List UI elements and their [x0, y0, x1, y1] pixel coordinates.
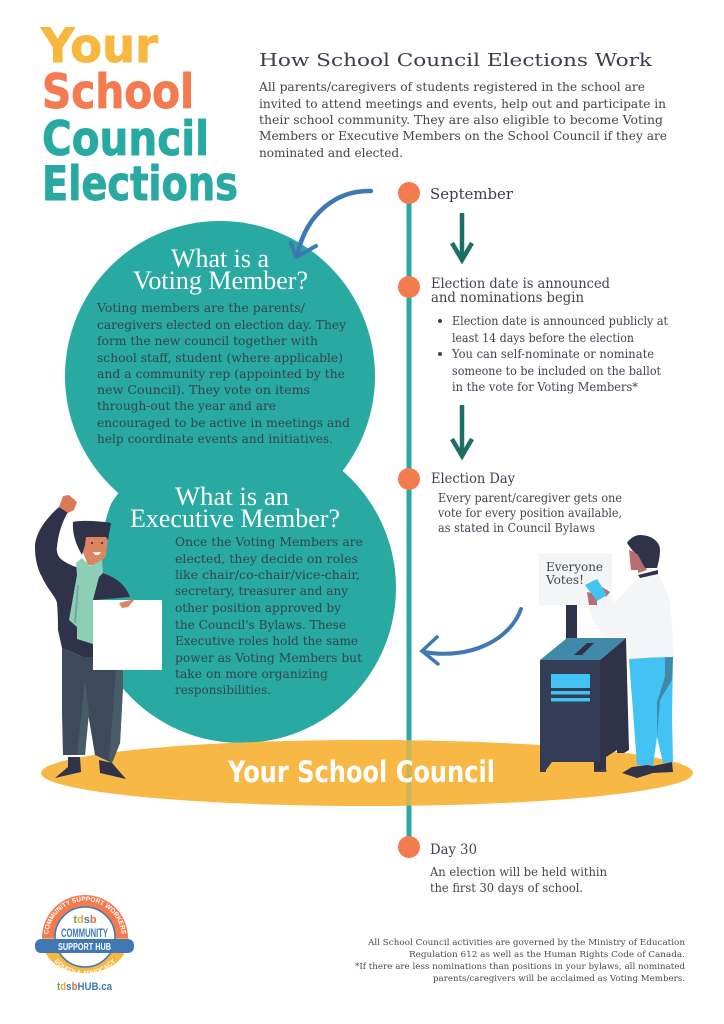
text: voting member description [96, 300, 350, 446]
arrow: blue curve to executive member [422, 609, 521, 664]
text: executive member description: secretary, treasurer and any [175, 583, 349, 598]
label: September: September [430, 185, 514, 203]
arrow: green down 1 [452, 213, 472, 260]
title [40, 19, 238, 212]
sign [93, 600, 162, 670]
text: day 30: Day 30 [430, 842, 477, 858]
text: executive member description: elected, they decide on roles [175, 551, 358, 566]
text: executive member description: other position approved by [175, 600, 342, 615]
intro text block: nominated and elected. [259, 145, 403, 160]
text: nominations: and nominations begin [431, 290, 584, 306]
text: election day: Every parent/caregiver gets one [438, 490, 622, 505]
title: Your [40, 19, 159, 74]
intro text block: Members or Executive Members on the School Council if they are [259, 128, 667, 143]
intro text block [258, 79, 667, 160]
text: executive member description: Once the Voting Members are [175, 534, 363, 549]
text: nominations: least 14 days before the election [452, 330, 634, 345]
text: nominations: someone to be included on the ballot [452, 363, 661, 378]
footnote: parents/caregivers will be acclaimed as Voting Members. [433, 974, 685, 984]
text: day 30: the first 30 days of school. [430, 880, 583, 895]
heading: voting member [133, 244, 308, 295]
text: nominations: in the vote for Voting Members* [452, 379, 639, 394]
text: voting member description: through-out the year and are [97, 398, 276, 413]
logo: COMMUNITY [61, 926, 108, 940]
text: election day: vote for every position available, [437, 505, 622, 520]
logo: tdsbHUB.ca [57, 981, 113, 993]
footnote: Regulation 612 as well as the Human Rights Code of Canada. [409, 950, 685, 960]
text: executive member description: like chair/co-chair/vice-chair, [175, 567, 360, 582]
panel: teal circles [65, 221, 396, 743]
text: executive member description: take on more organizing [175, 666, 328, 681]
arrow: blue curve to voting member [291, 191, 371, 257]
logo: tdsb [73, 914, 97, 926]
logo: EQUITY & ADVOCACY [54, 958, 114, 973]
footnote [355, 938, 686, 984]
title: Elections [42, 157, 238, 212]
title: School [42, 65, 194, 120]
panel: voting member [96, 244, 350, 446]
sign: everyone votes: Everyone [546, 560, 603, 574]
text: election day [431, 471, 622, 535]
arrow: green down 2 [452, 405, 472, 456]
text: day 30 [429, 842, 607, 895]
intro text block: their school community. They are also eligible to become Voting [259, 112, 663, 127]
panel: executive member [130, 482, 363, 697]
text: voting member description: new Council). They vote on items [97, 382, 310, 397]
text: voting member description: school staff, student (where applicable) [97, 350, 343, 365]
text: executive member description: power as Voting Members but [175, 650, 362, 665]
text: election day: Election Day [431, 471, 515, 487]
text: election day: as stated in Council Bylaws [438, 520, 595, 535]
footnote: *If there are less nominations than positions in your bylaws, all nominated [355, 962, 686, 972]
heading: voting member: Voting Member? [133, 266, 308, 295]
sign: everyone votes [539, 553, 612, 639]
figure: voter at ballot box [539, 535, 673, 778]
ground ellipse [41, 740, 693, 806]
ballot box [540, 638, 629, 772]
text: day 30: An election will be held within [429, 864, 607, 879]
text: nominations: Election date is announced [431, 276, 610, 292]
timeline dots [398, 182, 420, 858]
text: executive member description: the Council's Bylaws. These [175, 617, 346, 632]
text: executive member description [175, 534, 363, 697]
text: voting member description: caregivers elected on election day. They [97, 317, 347, 332]
footnote: All School Council activities are governed by the Ministry of Education [367, 938, 685, 948]
sign: everyone votes: Votes! [545, 573, 584, 587]
heading: executive member [130, 482, 340, 533]
heading: voting member: What is a [171, 244, 269, 273]
text: voting member description: and a community rep (appointed by the [97, 366, 345, 381]
title: Council [42, 112, 209, 167]
text: voting member description: Voting members are the parents/ [96, 300, 306, 315]
text: voting member description: encouraged to be active in meetings and [97, 415, 350, 430]
ground label: Your School Council [227, 755, 495, 789]
text: nominations: You can self-nominate or nominate [451, 346, 654, 361]
figure: man with sign [35, 495, 162, 779]
intro text block: All parents/caregivers of students registered in the school are [258, 79, 645, 94]
heading: how elections work: How School Council Elections Work [259, 50, 653, 71]
heading: executive member: Executive Member? [130, 504, 340, 533]
text: executive member description: Executive roles hold the same [175, 633, 358, 648]
logo: COMMUNITY SUPPORT WORKERS [44, 896, 126, 934]
text: nominations: Election date is announced publicly at [452, 313, 668, 328]
text: voting member description: help coordinate events and initiatives. [97, 431, 333, 446]
text: voting member description: form the new council together with [97, 333, 318, 348]
text: executive member description: responsibilities. [175, 682, 271, 697]
heading: executive member: What is an [175, 482, 289, 511]
logo [35, 895, 134, 993]
logo: SUPPORT HUB [58, 941, 111, 953]
white gap behind the raised arm [0, 492, 117, 620]
text: nominations [431, 276, 668, 394]
intro text block: invited to attend meetings and events, help out and participate in [259, 96, 666, 111]
timeline line [406, 190, 412, 850]
